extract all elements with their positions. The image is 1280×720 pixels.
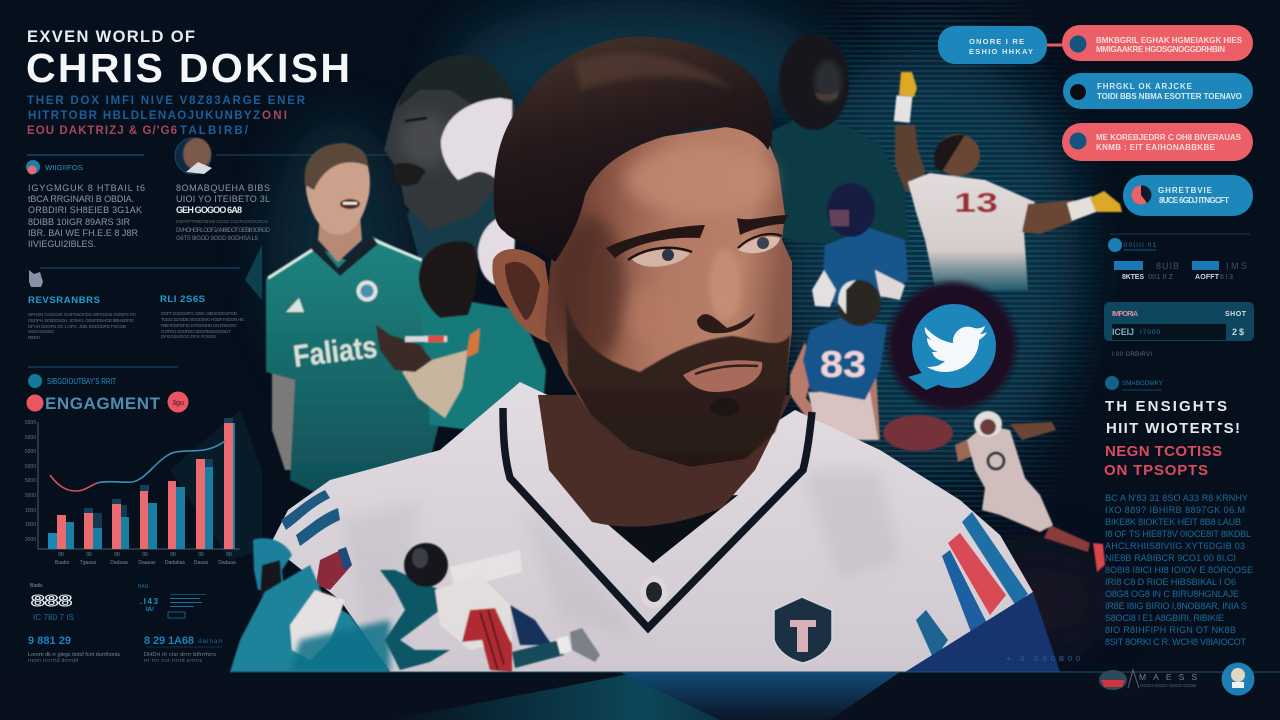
stat one: 888	[31, 593, 72, 610]
helmet	[827, 183, 875, 237]
mini label: 00IIII 01	[1124, 243, 1157, 249]
shoe	[1093, 543, 1105, 572]
mini table: AOFFT	[1195, 274, 1220, 281]
reviews body: FBB TGGFGF IG. D FGGGHG. DG FDSGGG	[161, 323, 237, 328]
y axis ticks: 3000	[25, 537, 36, 543]
right stripes	[962, 512, 1028, 606]
biography text: ORBDIRI SH8EIEB 3G1AK	[28, 205, 142, 215]
panel: insights: NEGN TCOTISS	[1105, 443, 1222, 460]
y axis ticks	[25, 420, 36, 543]
callout: red two	[1062, 123, 1253, 161]
insights body: IXO 889? IBHIRB 8897GK 06.M	[1105, 505, 1245, 515]
y axis ticks: 1000	[25, 508, 36, 514]
reviews body: TGGG 1D IGDB. SGOGSVG HGDF. FSGGN HG	[161, 317, 244, 322]
hand	[376, 325, 432, 372]
column two text: 8OMABQUEHA BIBS	[176, 183, 270, 193]
reviews heading: REVSRANBRS	[28, 295, 100, 306]
chart label: SIBGDIOUTBAY'S RRIT	[47, 377, 116, 386]
mini table: 6I3	[1220, 274, 1233, 281]
panel: mini stats	[1104, 234, 1254, 358]
callout: blue pie: GHRETBVIE	[1158, 186, 1213, 195]
figure: bending player	[376, 241, 546, 430]
bar chart	[25, 418, 240, 566]
releases heading: RLI 2S6S	[160, 294, 205, 305]
panel: reviews	[28, 268, 244, 340]
column two text: G6TS 8IGOD 9OGD 8GDHSA L9	[176, 236, 259, 242]
trend line	[50, 441, 225, 491]
background	[170, 0, 1105, 646]
stat two: IA!	[146, 607, 154, 613]
insights body: S8OCI8 I E1 A8GBIRI, RIBIKIE	[1105, 613, 1224, 623]
cheek shadow	[555, 215, 625, 365]
connected callouts	[938, 25, 1253, 216]
x axis labels: 00	[170, 552, 176, 558]
figure: running player	[955, 411, 1105, 572]
figure: football	[883, 415, 953, 451]
stat two: dainan	[198, 638, 222, 645]
red icon left	[26, 394, 44, 412]
stat one: IC 780 7 IS	[33, 613, 74, 622]
x axis labels: Daaaas	[138, 560, 156, 566]
callout: blue pie	[1123, 175, 1253, 216]
y axis ticks: 5000	[25, 478, 36, 484]
sleeve arm	[380, 570, 450, 670]
x axis labels: 00	[226, 552, 232, 558]
torso	[435, 575, 512, 650]
y axis ticks: 1000	[25, 522, 36, 528]
callout: blue pie: 8UCE 6GDJ ITNGCFT	[1159, 196, 1229, 205]
subtitle: ONI	[262, 110, 287, 122]
panel: biography columns	[26, 138, 400, 249]
y axis ticks: 5000	[25, 464, 36, 470]
helmet	[974, 411, 1002, 437]
left stripes	[281, 490, 340, 546]
x axis labels: 00	[58, 552, 64, 558]
icon: biography badge	[26, 160, 40, 174]
footer text: DIaxxI gRIfixuno: lifdk sLr.on	[45, 684, 140, 693]
biography text: IIVIEGUI2IBLES.	[28, 239, 96, 249]
right brow	[737, 215, 788, 235]
insights body: 8SIT 8ORKI C R. WCH8 V8IAIOCOT	[1105, 637, 1246, 647]
y axis ticks: 5000	[25, 449, 36, 455]
callout: blue one	[1063, 73, 1253, 109]
callout: top left blue	[938, 26, 1047, 64]
x axis labels	[55, 552, 236, 566]
left arm	[272, 360, 298, 470]
V collar	[503, 408, 812, 628]
biography label: WIIGIIFOS	[45, 163, 83, 172]
callout: top left blue: ESHIO HHKAY	[969, 47, 1033, 56]
shoe	[570, 628, 600, 662]
x axis labels: 00	[86, 552, 92, 558]
sponsor text: Faliats	[291, 329, 379, 374]
left eye	[628, 248, 692, 267]
callout: red one: BMKBGRIL EGHAK HGMEIAKGK HIES	[1096, 36, 1243, 45]
footer logos: GGGH GGGG GGGG GGGB	[1140, 683, 1196, 688]
data card: ICEIJ	[1112, 327, 1134, 337]
navy thigh	[510, 605, 552, 645]
kicker heading: EXVEN WORLD OF	[27, 28, 195, 46]
callout: red two: KNMB : EIT EAIHONABBKBE	[1096, 143, 1216, 152]
x axis labels: Baabs	[55, 560, 70, 566]
y axis ticks: 5000	[25, 493, 36, 499]
insights heading: TH ENSIGHTS	[1105, 398, 1227, 415]
pie icon	[1132, 185, 1151, 204]
column two text	[176, 183, 271, 242]
helmet	[404, 543, 448, 587]
reviews body: DGFT GSGGSFG. GDG. GBGOGGGFGD	[161, 311, 238, 316]
jersey	[908, 173, 1035, 292]
x axis labels: 00	[198, 552, 204, 558]
biography text: 8DIBB 10IGR 89ARS 3IR	[28, 217, 130, 227]
flag	[450, 550, 522, 590]
neck	[538, 395, 792, 527]
column two text: GEH GOGOO 6A8	[176, 205, 242, 215]
mini table: IMS	[1226, 261, 1247, 271]
card footnote: I:00 ORBIRVI	[1112, 352, 1152, 358]
stat two	[138, 584, 222, 664]
chart icon	[28, 374, 42, 388]
data card: I7000	[1140, 329, 1160, 336]
reviews body: OFHSN GHGGJR GSIFDSOVDG 8IFGOGS GOGFS FO	[28, 312, 136, 317]
biography text: tBCA RRGINARI B OBDIA.	[28, 194, 134, 204]
x axis labels: Tgaaas	[80, 560, 97, 566]
data card: SHOT	[1225, 311, 1247, 318]
icon: twitter	[888, 282, 1016, 410]
callout: red one	[1062, 25, 1253, 61]
bars	[48, 418, 235, 549]
panel: engagement chart	[25, 367, 240, 566]
subtitle: TALBIRB/	[180, 125, 249, 137]
x axis labels: Daaas	[194, 560, 209, 566]
arm	[402, 350, 468, 418]
jersey	[803, 318, 887, 400]
navy sleeve	[905, 592, 1060, 672]
footer credit	[27, 678, 140, 694]
insights body: 8IO R8IHFIPH RIGN OT NK8B	[1105, 625, 1236, 635]
callout: blue one: FHRGKL OK ARJCKE	[1097, 82, 1193, 91]
beard	[566, 300, 790, 468]
insights body: O8G8 OG8 IN C BIRU8HGNLAJE	[1105, 589, 1239, 599]
reviews body: DFI IH GOGFS SG 1 GFG. JOB. BGDGDFD FSGGB	[28, 324, 126, 329]
stat two: .I43	[140, 597, 159, 606]
stat one: Badis	[30, 583, 43, 589]
logo: left emblem	[1099, 670, 1139, 690]
insights body: BIKE8K 8IOKTEK HEIT 8B8 LAUB	[1105, 517, 1241, 527]
figure: blue helmet player	[812, 183, 908, 310]
column two text: UIOI YO ITEIBETO 3L	[176, 194, 270, 204]
subtitle: HITRTOBR HBLDLENAOJUKUNBYZ	[28, 110, 260, 122]
insights icon	[1105, 376, 1119, 390]
data card	[1104, 302, 1254, 341]
cheek highlight	[618, 287, 682, 343]
black undershirt	[585, 495, 738, 563]
reviews body: G OFGG GGGFDG. GDG PB SGGGGG T	[161, 329, 231, 334]
panel: statistics	[28, 583, 222, 664]
data card: 2 $	[1232, 327, 1244, 337]
figure: smiling player in green jersey	[266, 143, 445, 500]
portrait icon	[175, 138, 212, 174]
crest	[356, 280, 378, 302]
stat two: DHDrt rlr clsr drrrr btfrrrhrrs	[144, 652, 216, 658]
head	[936, 134, 980, 176]
main title: CHRIS DOKISH	[26, 45, 350, 91]
x axis labels: Dadabas	[165, 560, 186, 566]
reviews body: GEOFH. BGIDGSOH. JOSHG. GBSFDSHOD BBHSDFIG	[28, 318, 134, 323]
title block	[26, 28, 350, 137]
y axis ticks: 5000	[25, 420, 36, 426]
raised arm	[895, 125, 925, 198]
footer logos	[1099, 662, 1254, 696]
mini icon	[1108, 238, 1122, 252]
right eye	[738, 234, 782, 253]
adidas mark	[286, 298, 304, 312]
forehead highlight	[625, 146, 775, 214]
figure: player with raised arm, number 13	[894, 72, 1122, 292]
pants	[808, 392, 878, 440]
mini table: 0II1 II Z	[1148, 274, 1174, 281]
y axis ticks: 5000	[25, 435, 36, 441]
footer logo	[27, 678, 43, 694]
callout: top left blue: ONORE I RE	[969, 37, 1024, 46]
x axis labels: 00	[142, 552, 148, 558]
nose shadow	[697, 313, 755, 333]
jersey button	[640, 576, 668, 608]
hair	[494, 37, 772, 262]
green jersey	[266, 236, 445, 500]
face	[545, 122, 792, 468]
panel: insights: HIIT WIOTERTS!	[1106, 420, 1240, 437]
icon: small mascot	[29, 270, 43, 287]
stat one: Lorem dk rr giegs tiotsf fcnt durrthonis	[28, 652, 120, 658]
ear	[492, 249, 558, 345]
figure: number 83 player	[790, 280, 887, 440]
figure: dark man, back right	[770, 34, 908, 250]
insights body: I8 OF TS HIE8T8V 0IOCE8IT 8IKDBL	[1105, 529, 1251, 539]
insights body: 8O8I8 I8ICI HI8 IOIOV E 8OROOSE	[1105, 565, 1253, 575]
callout: red two: ME KOREBJEDRR C OH8 BIVERAUAS	[1096, 133, 1242, 142]
figure: man with dark jacket, back left	[384, 55, 515, 290]
bottom caption: + 0 0X0B00	[1006, 654, 1080, 663]
neck	[318, 215, 362, 262]
red pants	[462, 608, 512, 672]
reviews body: DFGGSHGGG DFS FOSGS	[161, 334, 216, 339]
figure: blue figure, bottom left	[230, 538, 390, 672]
reviews body	[28, 311, 244, 340]
callout: red one: MMIGAAKRE HGOSGNOGGDRHBIN	[1096, 45, 1225, 54]
biography text: IGYGMGUK 8 HTBAIL t6	[28, 183, 145, 193]
insights body: BC A N'83 31 8SO A33 R8 KRNHY	[1105, 493, 1248, 503]
subtitle: EOU DAKTRIZJ & G/'G6	[27, 125, 177, 137]
stat one: 9 881 29	[28, 635, 71, 647]
panel: insights: ON TPSOPTS	[1104, 462, 1208, 479]
figure: main man	[270, 37, 1060, 672]
stat one: rrenn rrcrrrtd drrrrdd	[28, 658, 78, 664]
reviews body: DSSVSSHSG	[28, 329, 54, 334]
insights body	[1105, 493, 1253, 647]
lips	[683, 360, 762, 392]
data card: IMPORIA	[1112, 311, 1138, 318]
logo: right emblem	[1222, 662, 1254, 696]
x axis labels: Dadaaa	[110, 560, 128, 566]
mini table	[1114, 261, 1247, 281]
stat two: BAN	[138, 584, 149, 590]
mini table: 8KTES	[1122, 274, 1144, 281]
white shape behind head	[441, 98, 512, 190]
x axis labels: 00	[114, 552, 120, 558]
insights body: NIE8B RABIBCR 9CO1 00 8I.CI	[1105, 553, 1236, 563]
mini table: 8UIB	[1156, 261, 1179, 271]
head	[306, 144, 370, 235]
subtitle	[27, 95, 306, 137]
panel: insights	[1104, 376, 1253, 647]
reviews body: FSGGH	[28, 335, 40, 340]
insights body: IR8E I8IG BIRIO I,8NOB8AR, INIA S	[1105, 601, 1247, 611]
red badge	[168, 392, 188, 412]
column two text: DSPGPTFBDGBVW GOSG DSGFGODOOGVS	[176, 219, 268, 224]
stat two: rrr trrr rrsr rrrrrd srrrrrs	[144, 658, 202, 664]
right arm	[1022, 200, 1075, 234]
column two text: DVHOHGRL OGFJ,AN68DOT GEBI8 3GRGD	[176, 228, 271, 234]
figure: crouching football player	[380, 543, 600, 672]
biography text: IBR. BAI WE FH.E.E 8 J8R	[28, 228, 138, 238]
biography text	[28, 183, 145, 249]
x axis labels: Dadaaa	[218, 560, 236, 566]
insights body: AHCLRHIIS8IVIIG XYT6DGIB 03	[1105, 541, 1245, 551]
number: 83	[820, 344, 866, 385]
red badge: 3gu	[172, 400, 184, 407]
soul patch	[710, 398, 740, 416]
stat two: 8 29 1A68	[144, 635, 194, 647]
insights label: SMABGDMKY	[1122, 380, 1164, 387]
crest	[774, 597, 832, 663]
number: 13	[954, 187, 998, 218]
glove	[899, 72, 917, 97]
insights body: IRI8 C8 D RIOE HIBSBIKAL I O6	[1105, 577, 1236, 587]
stat one	[28, 583, 120, 664]
subtitle: THER DOX IMFI NIVE V8Z83ARGE ENER	[27, 95, 306, 107]
logo: left text: MAESS	[1139, 672, 1197, 682]
nose highlight	[709, 249, 741, 321]
engagement heading: ENGAGMENT	[45, 394, 161, 413]
bottom band	[0, 654, 1280, 720]
lower leg	[512, 640, 564, 668]
callout: blue one: TOIDI BBS NBMA ESOTTER TOENAVO	[1097, 92, 1242, 101]
jersey body	[270, 382, 1033, 672]
helmet	[837, 280, 881, 326]
left brow	[606, 225, 705, 258]
